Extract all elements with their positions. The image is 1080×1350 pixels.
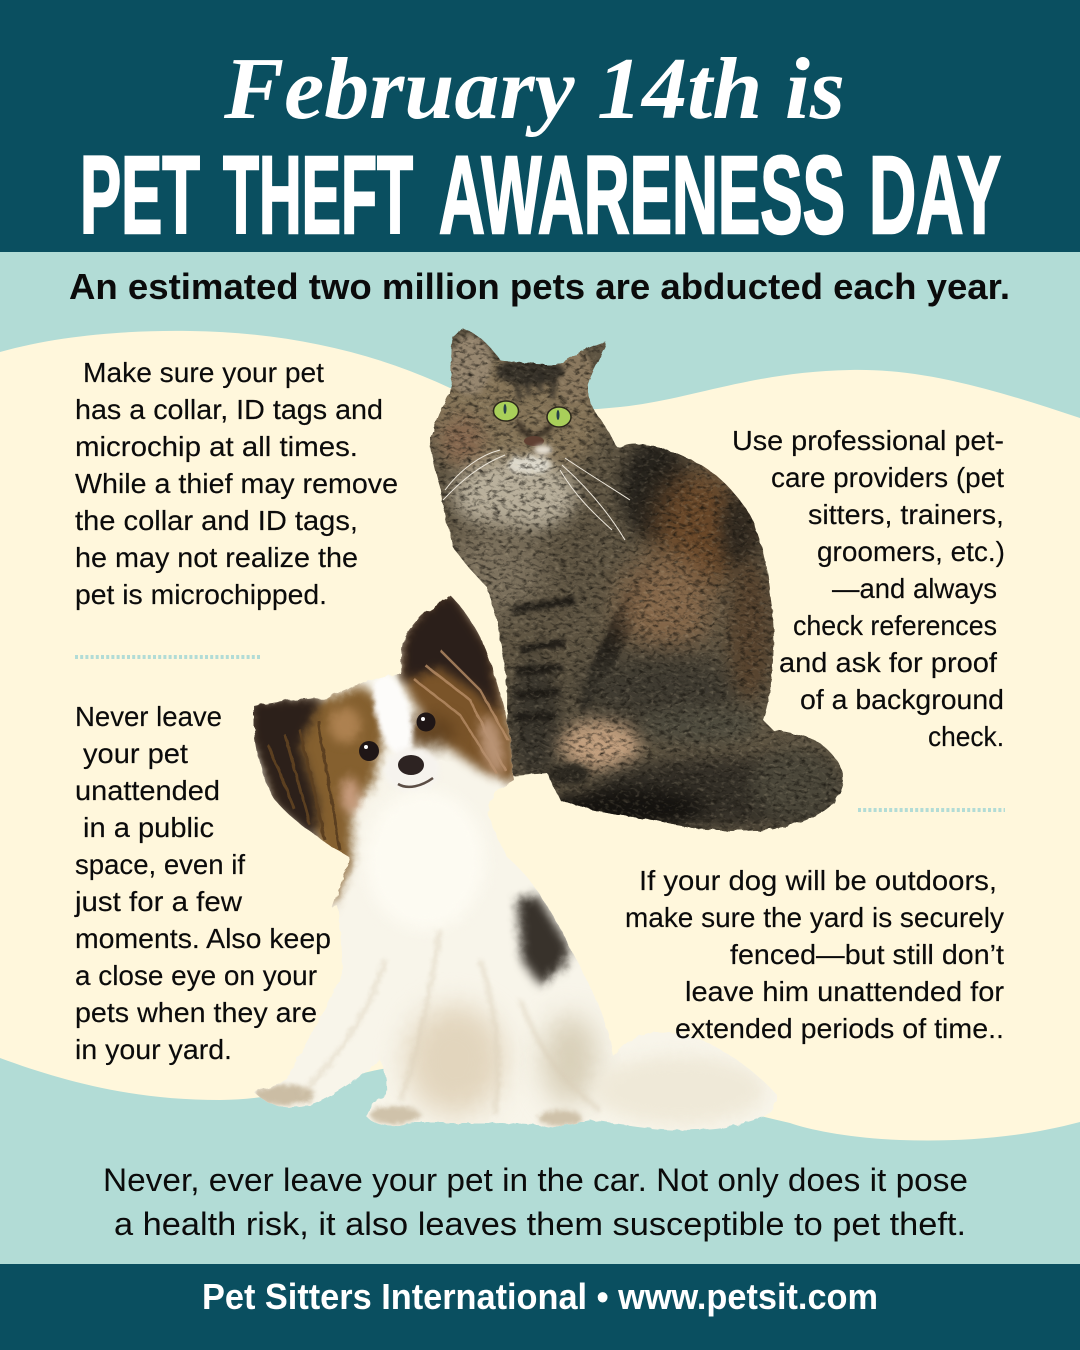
tip: never leave unattended: Never leave — [75, 701, 222, 732]
closing message — [103, 1162, 968, 1242]
tip: professional pet-care providers: and ask for proof — [779, 647, 997, 678]
dog eyes and nose — [359, 712, 436, 787]
tip: collar and microchip: While a thief may remove — [75, 468, 398, 499]
tip: never leave unattended: just for a few — [74, 886, 242, 917]
tip: fenced yard: fenced—but still don’t — [730, 939, 1004, 970]
tip: professional pet-care providers: check. — [928, 721, 1004, 752]
tip: never leave unattended: in your yard. — [75, 1034, 232, 1065]
footer band — [0, 1264, 1080, 1350]
tip: fenced yard: If your dog will be outdoors, — [639, 865, 997, 896]
tip: professional pet-care providers: groomers, etc.) — [817, 536, 1005, 567]
tip: professional pet-care providers: care providers (pet — [771, 462, 1004, 493]
tip: collar and microchip: he may not realize the — [75, 542, 358, 573]
tip: never leave unattended: unattended — [75, 775, 220, 806]
tip: professional pet-care providers: —and always — [832, 573, 997, 604]
subtitle: An estimated two million pets are abducted each year. — [69, 266, 1010, 307]
illustration: cat — [420, 320, 860, 840]
tip: professional pet-care providers: sitters, trainers, — [808, 499, 1004, 530]
tip: fenced yard: extended periods of time.. — [675, 1013, 1004, 1044]
tip: fenced yard — [625, 865, 1004, 1044]
cat face stripes and muzzle — [517, 372, 555, 455]
light teal background — [0, 252, 1080, 1264]
cream wavy panel — [0, 331, 1080, 1140]
cat whiskers — [443, 450, 630, 540]
title main line: THEFT — [223, 134, 413, 257]
tip: collar and microchip: pet is microchipped. — [75, 579, 327, 610]
tip: professional pet-care providers: of a background — [800, 684, 1004, 715]
closing message: Never, ever leave your pet in the car. Not only does it pose — [103, 1162, 968, 1198]
tip: never leave unattended: in a public — [83, 812, 214, 843]
tip: professional pet-care providers — [732, 425, 1005, 752]
dog back patch — [517, 895, 570, 985]
title banner — [0, 0, 1080, 257]
tip: never leave unattended: a close eye on your — [75, 960, 317, 991]
tip: fenced yard: make sure the yard is securely — [625, 902, 1004, 933]
dog blaze and muzzle — [369, 674, 416, 753]
tip: never leave unattended: space, even if — [75, 849, 245, 880]
illustration: dog — [240, 590, 790, 1150]
dog left ear — [250, 685, 392, 910]
tip: collar and microchip: microchip at all times. — [75, 431, 358, 462]
cat eyes — [494, 401, 571, 427]
tip: never leave unattended — [74, 701, 331, 1065]
tip: collar and microchip: Make sure your pet — [83, 357, 324, 388]
footer text: Pet Sitters International • www.petsit.com — [202, 1276, 878, 1317]
title main line: PET — [80, 134, 200, 257]
tip: never leave unattended: your pet — [83, 738, 188, 769]
tip: never leave unattended: pets when they are — [75, 997, 317, 1028]
tip: fenced yard: leave him unattended for — [685, 976, 1004, 1007]
tip: collar and microchip — [75, 357, 398, 610]
tip: collar and microchip: the collar and ID tags, — [75, 505, 358, 536]
tip: collar and microchip: has a collar, ID tags and — [75, 394, 383, 425]
tip: professional pet-care providers: check references — [793, 610, 997, 641]
closing message: a health risk, it also leaves them susceptible to pet theft. — [114, 1206, 966, 1242]
title script line: February 14th is — [223, 41, 845, 138]
tip: professional pet-care providers: Use professional pet- — [732, 425, 1004, 456]
title main line — [80, 134, 1001, 257]
tip: never leave unattended: moments. Also keep — [75, 923, 331, 954]
dog right ear — [400, 590, 518, 785]
